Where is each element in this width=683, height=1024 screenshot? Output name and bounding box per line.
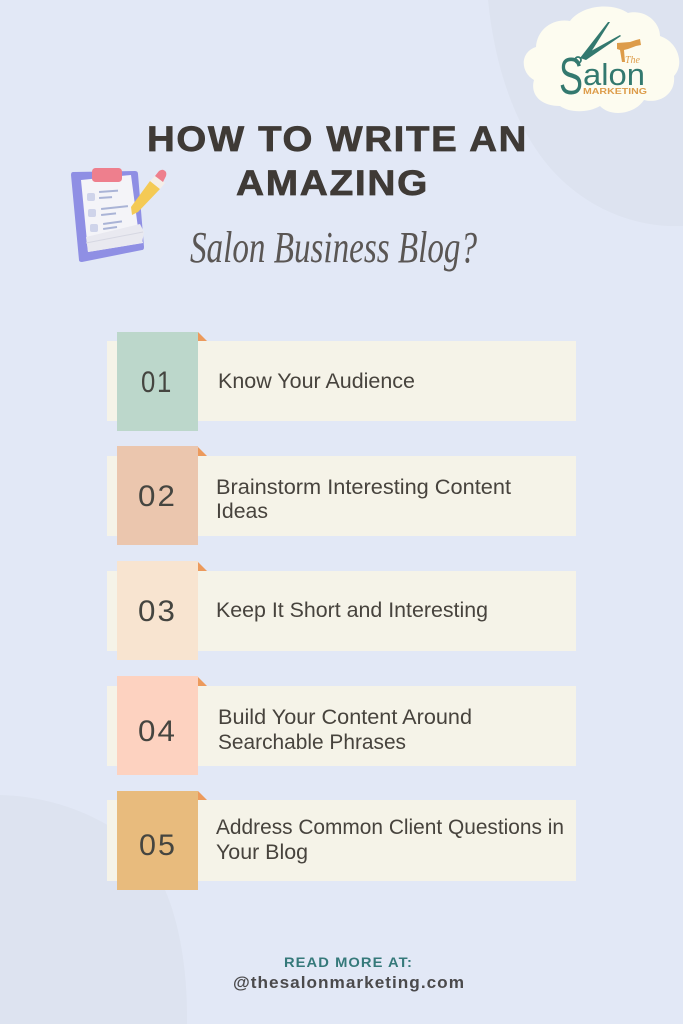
step 2 bar [107, 456, 576, 536]
step 5 [107, 791, 576, 890]
logo [524, 6, 679, 113]
step 2 fold [198, 447, 207, 456]
step 4 text: Build Your Content Around [218, 706, 472, 729]
step 5 bar [107, 800, 576, 881]
logo hair dryer [617, 39, 641, 62]
step 4 number box [117, 676, 198, 775]
step 2 text [216, 476, 511, 523]
pencil [131, 170, 166, 215]
step 5 number box [117, 791, 198, 890]
step 3 [107, 561, 576, 660]
step 4 fold [198, 677, 207, 686]
title line 2: AMAZING [236, 164, 429, 203]
step 3 text: Keep It Short and Interesting [216, 599, 488, 622]
step 3 number box [117, 561, 198, 660]
step 5 fold [198, 791, 207, 800]
step 4 [107, 676, 576, 775]
logo wordmark: alon [583, 57, 645, 92]
step 4 number: 04 [138, 715, 177, 748]
checklist lines [87, 190, 128, 232]
footer [233, 954, 465, 992]
logo wordmark: S [559, 48, 583, 106]
logo wordmark [559, 48, 645, 106]
step 4 text [218, 706, 472, 754]
step 5 text: Address Common Client Questions in [216, 816, 564, 839]
step 1 number box [117, 332, 198, 431]
logo cloud [524, 6, 679, 113]
step 4 bar [107, 686, 576, 766]
step 1 text: Know Your Audience [218, 370, 415, 393]
clipboard clip [92, 168, 122, 182]
step 1 [107, 332, 576, 431]
read more label: READ MORE AT: [284, 954, 413, 970]
background blob: bottom left [0, 795, 187, 1024]
step 1 number: 01 [141, 366, 173, 399]
logo: the: The [625, 55, 641, 66]
step 3 fold [198, 562, 207, 571]
step 5 number: 05 [139, 829, 177, 862]
step 3 bar [107, 571, 576, 651]
step 2 text: Ideas [216, 500, 268, 523]
title [147, 120, 528, 272]
step 4 text: Searchable Phrases [218, 731, 406, 754]
step 3 number: 03 [138, 595, 177, 628]
website handle: @thesalonmarketing.com [233, 973, 465, 992]
clipboard board [71, 171, 144, 262]
step 5 text [216, 816, 564, 864]
step 5 text: Your Blog [216, 841, 308, 864]
icon: clipboard and pencil [71, 168, 166, 262]
step 2 number: 02 [138, 480, 177, 513]
step 2 [107, 446, 576, 545]
background blob: top right [488, 0, 683, 226]
script subtitle: Salon Business Blog? [190, 223, 477, 272]
step 2 number box [117, 446, 198, 545]
step 2 text: Brainstorm Interesting Content [216, 476, 511, 499]
step 1 bar [107, 341, 576, 421]
step 1 fold [198, 332, 207, 341]
title line 1: HOW TO WRITE AN [147, 120, 528, 159]
logo: marketing: MARKETING [583, 87, 647, 96]
logo scissors [575, 22, 621, 63]
clipboard paper [81, 175, 143, 252]
